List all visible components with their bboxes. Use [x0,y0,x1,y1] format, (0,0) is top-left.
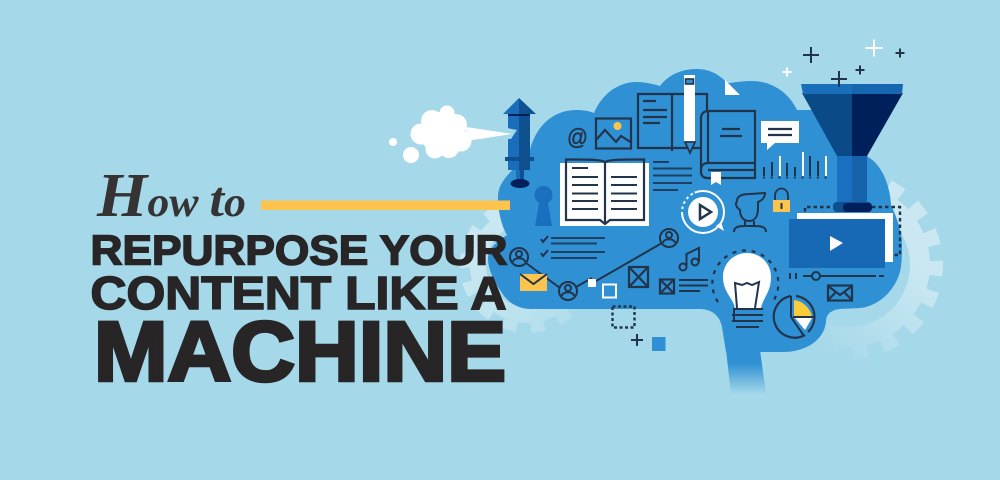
icon: person [734,193,766,232]
heading: machine: MACHINE [94,304,506,398]
icon: pencil [684,75,695,153]
icon: yellow envelope [520,274,547,291]
icon: play speech circle [682,191,724,233]
icon: at sign: @ [567,124,588,150]
heading: how to: How to [96,162,246,230]
brain silhouette [488,69,902,394]
icon: paper corner [725,80,740,95]
icon: outline square [603,284,616,298]
dotted video frame [805,207,900,255]
icon: smoke cloud [389,106,512,163]
gear: right [760,176,936,354]
icon: crossed box large [629,267,648,287]
icon: dotted square [612,306,634,328]
heading: content like a: CONTENT LIKE A [90,267,506,319]
text lines beside book [653,162,692,190]
icon: rocket [503,98,536,188]
icon: network of users [510,229,678,300]
sparkle pluses [782,40,904,87]
heading: repurpose your: REPURPOSE YOUR [90,226,507,274]
icon: video player [789,213,893,280]
icon: keyhole [534,186,552,226]
icon: closed book [701,111,755,185]
yellow bar [261,200,510,210]
icon: picture frame [596,118,632,148]
icon: open book with lines [638,94,707,151]
icon: checklist [541,236,605,258]
brain stem fade [726,350,766,394]
icon: music note [680,248,699,270]
icon: open book large [560,159,649,226]
icon: padlock [773,188,790,212]
icon: plus and blue square [631,334,666,351]
icon: pie chart [774,296,814,338]
icon: equalizer bars [763,152,829,178]
icon: light bulb [712,251,778,327]
gear: left [465,202,591,328]
icon: speech bubble [761,121,799,150]
icon: funnel [801,84,903,212]
icon: crossed box small with lines [660,280,708,294]
icon: mail envelope [828,286,852,300]
